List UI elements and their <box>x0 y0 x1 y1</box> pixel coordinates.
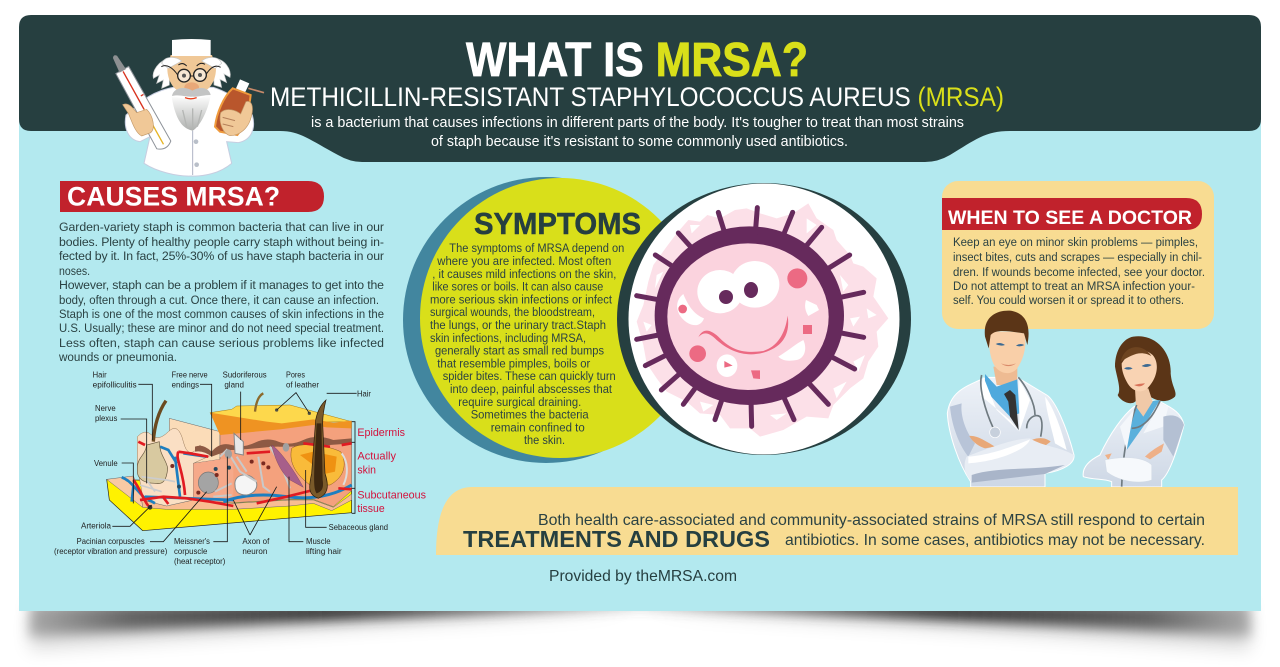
doctor advice text: insect bites, cuts and scrapes — especially in chil- <box>953 250 1202 264</box>
white circle <box>628 184 900 454</box>
symptoms body text: require surgical draining. <box>458 395 581 409</box>
diagram labels: Hair <box>357 389 371 399</box>
bacterium illustration <box>617 183 911 455</box>
heading: causes MRSA: CAUSES MRSA? <box>67 182 280 212</box>
main light-blue panel <box>19 100 1261 611</box>
symptoms body text: skin infections, including MRSA, <box>430 331 586 345</box>
header description: of staph because it's resistant to some commonly used antibiotics. <box>431 133 848 150</box>
causes body text <box>58 220 384 364</box>
causes body text: Garden-variety staph is common bacteria that can live in our <box>59 220 384 234</box>
treatments text second line: antibiotics. In some cases, antibiotics may not be necessary. <box>785 532 1205 549</box>
bottom drop shadow <box>30 604 1250 650</box>
icon: male and female doctors <box>947 311 1184 487</box>
causes body text: bodies. Plenty of healthy people carry staph without being in- <box>59 235 384 249</box>
heading: when to see a doctor: WHEN TO SEE A DOCTOR <box>948 207 1192 229</box>
diagram labels: Meissner's <box>174 536 210 546</box>
male doctor <box>947 311 1074 487</box>
symptoms body text: surgical wounds, the bloodstream, <box>430 305 595 319</box>
diagram labels: Nerve <box>95 403 116 413</box>
doctor advice text: dren. If wounds become infected, see your doctor. <box>953 265 1205 279</box>
header description: is a bacterium that causes infections in different parts of the body. It's tougher to treat than most strains <box>311 114 964 131</box>
symptoms body text: more serious skin infections or infect <box>430 292 613 306</box>
heading: when to see a doctor <box>942 198 1202 230</box>
yellow symptoms circle <box>420 178 700 458</box>
diagram labels: plexus <box>95 413 117 423</box>
diagram labels: (heat receptor) <box>174 556 226 566</box>
panel: causes <box>54 181 426 566</box>
cream card <box>942 181 1214 329</box>
source credit: Provided by theMRSA.com <box>549 568 737 585</box>
symptoms body text: like sores or boils. It can also cause <box>432 280 603 294</box>
diagram labels: endings <box>172 379 199 389</box>
doctor advice text: Do not attempt to treat an MRSA infection your- <box>953 279 1195 293</box>
diagram labels: Free nerve <box>172 369 208 379</box>
diagram labels: Actually <box>357 450 397 462</box>
panel: symptoms <box>403 177 700 463</box>
diagram labels: tissue <box>357 503 385 515</box>
symptoms body text: the lungs, or the urinary tract.Staph <box>430 318 606 332</box>
symptoms body text: the skin. <box>524 433 565 447</box>
symptoms body text: The symptoms of MRSA depend on <box>449 241 624 255</box>
icon: bacterium character <box>637 203 888 437</box>
treatments text: Both health care-associated and community-associated strains of MRSA still respond to certain <box>538 512 1205 529</box>
symptoms body text: generally start as small red bumps <box>435 344 604 358</box>
chart: skin cross-section diagram <box>54 369 426 566</box>
diagram labels: Pores <box>286 369 305 379</box>
symptoms body text: spider bites. These can quickly turn <box>443 369 616 383</box>
diagram labels: skin <box>357 464 376 476</box>
diagram labels: Axon of <box>242 536 270 546</box>
symptoms body text: into deep, painful abscesses that <box>450 382 613 396</box>
diagram labels: of leather <box>286 379 319 389</box>
diagram labels: Subcutaneous <box>357 489 426 501</box>
diagram labels: neuron <box>242 546 268 556</box>
causes body text: noses. <box>59 264 90 278</box>
diagram labels: Muscle <box>306 536 331 546</box>
diagram labels: gland <box>224 379 244 389</box>
diagram labels: Sebaceous gland <box>329 522 388 532</box>
causes body text: However, staph can be a problem if it manages to get into the <box>59 278 384 292</box>
symptoms body text <box>430 241 624 447</box>
doctor advice text: self. You could worsen it or spread it to others. <box>953 293 1184 307</box>
header description <box>311 114 964 150</box>
doctor advice text: Keep an eye on minor skin problems — pimples, <box>953 235 1198 249</box>
symptoms body text: where you are infected. Most often <box>436 254 611 268</box>
diagram labels: epifolliculitis <box>93 379 137 389</box>
causes body text: U.S. Usually; these are minor and do not need special treatment. <box>59 321 384 335</box>
dark circle frame <box>617 183 911 455</box>
diagram labels: Sudoriferous <box>223 369 267 379</box>
blue ring behind symptoms circle <box>403 177 689 463</box>
diagram labels: Epidermis <box>357 427 405 439</box>
diagram labels: Hair <box>93 369 107 379</box>
heading: symptoms: SYMPTOMS <box>474 206 641 241</box>
symptoms body text: , it causes mild infections on the skin, <box>432 267 616 281</box>
dark header band <box>19 15 1261 162</box>
diagram labels: (receptor vibration and pressure) <box>54 546 168 556</box>
symptoms body text: remain confined to <box>491 420 585 434</box>
causes body text: fected by it. In fact, 25%-30% of us have staph bacteria in our <box>59 249 384 263</box>
panel: when to see a doctor <box>942 181 1214 329</box>
diagram labels: corpuscle <box>174 546 208 556</box>
diagram labels: Arteriola <box>81 521 111 531</box>
diagram labels: Pacinian corpuscles <box>77 536 145 546</box>
doctor advice text <box>953 235 1205 307</box>
causes body text: wounds or pneumonia. <box>58 350 177 364</box>
diagram labels: Venule <box>94 458 118 468</box>
title: WHAT IS MRSA? <box>466 34 808 87</box>
panel: treatments and drugs <box>436 487 1238 555</box>
subtitle: METHICILLIN-RESISTANT STAPHYLOCOCCUS AUREUS (MRSA) <box>270 82 1004 112</box>
female doctor <box>1083 336 1184 487</box>
symptoms body text: Sometimes the bacteria <box>471 408 589 422</box>
symptoms body text: that resemble pimples, boils or <box>437 356 590 370</box>
causes body text: Staph is one of the most common causes of skin infections in the <box>59 307 384 321</box>
causes body text: body, often through a cut. Once there, it can cause an infection. <box>59 293 379 307</box>
causes body text: Less often, staph can cause serious problems like infected <box>59 336 384 350</box>
cream banner <box>436 487 1238 555</box>
diagram labels: lifting hair <box>306 546 342 556</box>
heading: treatments and drugs: TREATMENTS AND DRUGS <box>463 526 770 552</box>
icon: doctor mascot with thermometer and bottle <box>107 39 264 176</box>
diagram labels <box>54 369 426 566</box>
